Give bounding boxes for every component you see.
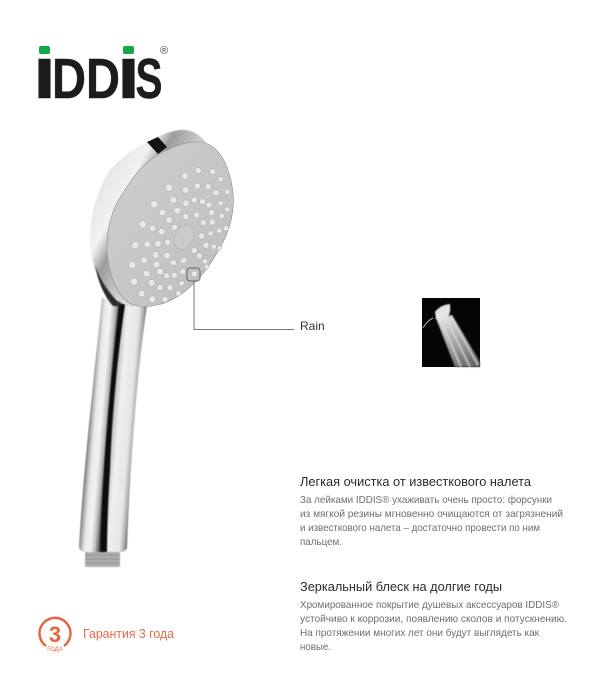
warranty ring (40, 618, 70, 646)
photo shower head (435, 304, 450, 320)
logo registered mark: ® (160, 45, 168, 57)
heading: easy cleaning: Легкая очистка от известкового налета (300, 474, 532, 489)
warranty badge (40, 618, 175, 653)
callout: Rain (187, 268, 325, 333)
logo wordmark: I (34, 47, 56, 111)
head dark notch (147, 137, 167, 154)
callout label: Rain (300, 319, 325, 333)
body: mirror shine (300, 599, 567, 653)
shower handset (79, 130, 233, 567)
head chrome back (90, 130, 206, 307)
body: mirror shine: Хромированное покрытие душевых аксессуаров IDDIS® (300, 599, 559, 611)
photo background (422, 298, 480, 367)
logo: IDDIS (34, 45, 168, 111)
logo wordmark (34, 47, 162, 111)
warranty text: Гарантия 3 года (83, 626, 175, 641)
warranty years label: ГОДА (47, 647, 63, 653)
logo wordmark: D (86, 47, 120, 111)
heading: mirror shine: Зеркальный блеск на долгие годы (300, 579, 502, 594)
head dark neck shadow (95, 265, 122, 306)
logo wordmark: S (136, 47, 162, 111)
logo wordmark: I (118, 47, 140, 111)
body: easy cleaning (300, 494, 563, 548)
body: easy cleaning: пальцем. (300, 536, 342, 548)
center disc (170, 221, 198, 253)
body: easy cleaning: За лейками IDDIS® ухаживать очень просто: форсунки (300, 494, 552, 506)
body: mirror shine: устойчиво к коррозии, появлению сколов и потускнению. (300, 613, 567, 625)
body: easy cleaning: и известкового налета – достаточно провести по ним (300, 522, 540, 534)
nozzles (129, 168, 230, 303)
handle (79, 298, 147, 552)
callout marker box (187, 268, 200, 281)
photo: rain spray (422, 298, 480, 367)
text block: easy cleaning (300, 474, 563, 548)
logo green dots (39, 46, 134, 54)
photo water spray (436, 315, 480, 367)
warranty number: 3 (49, 622, 61, 647)
callout leader line (194, 281, 294, 330)
logo wordmark: D (52, 47, 86, 111)
body: mirror shine: новые. (300, 641, 331, 653)
thread connector (85, 551, 120, 567)
photo hose (423, 318, 433, 328)
head rubber face (107, 142, 233, 306)
handle dark reflection (100, 304, 125, 552)
body: mirror shine: На протяжении многих лет они будут выглядеть как (300, 627, 539, 639)
text block: mirror shine (300, 579, 567, 653)
body: easy cleaning: из мягкой резины мгновенно очищаются от загрязнений (300, 508, 563, 520)
